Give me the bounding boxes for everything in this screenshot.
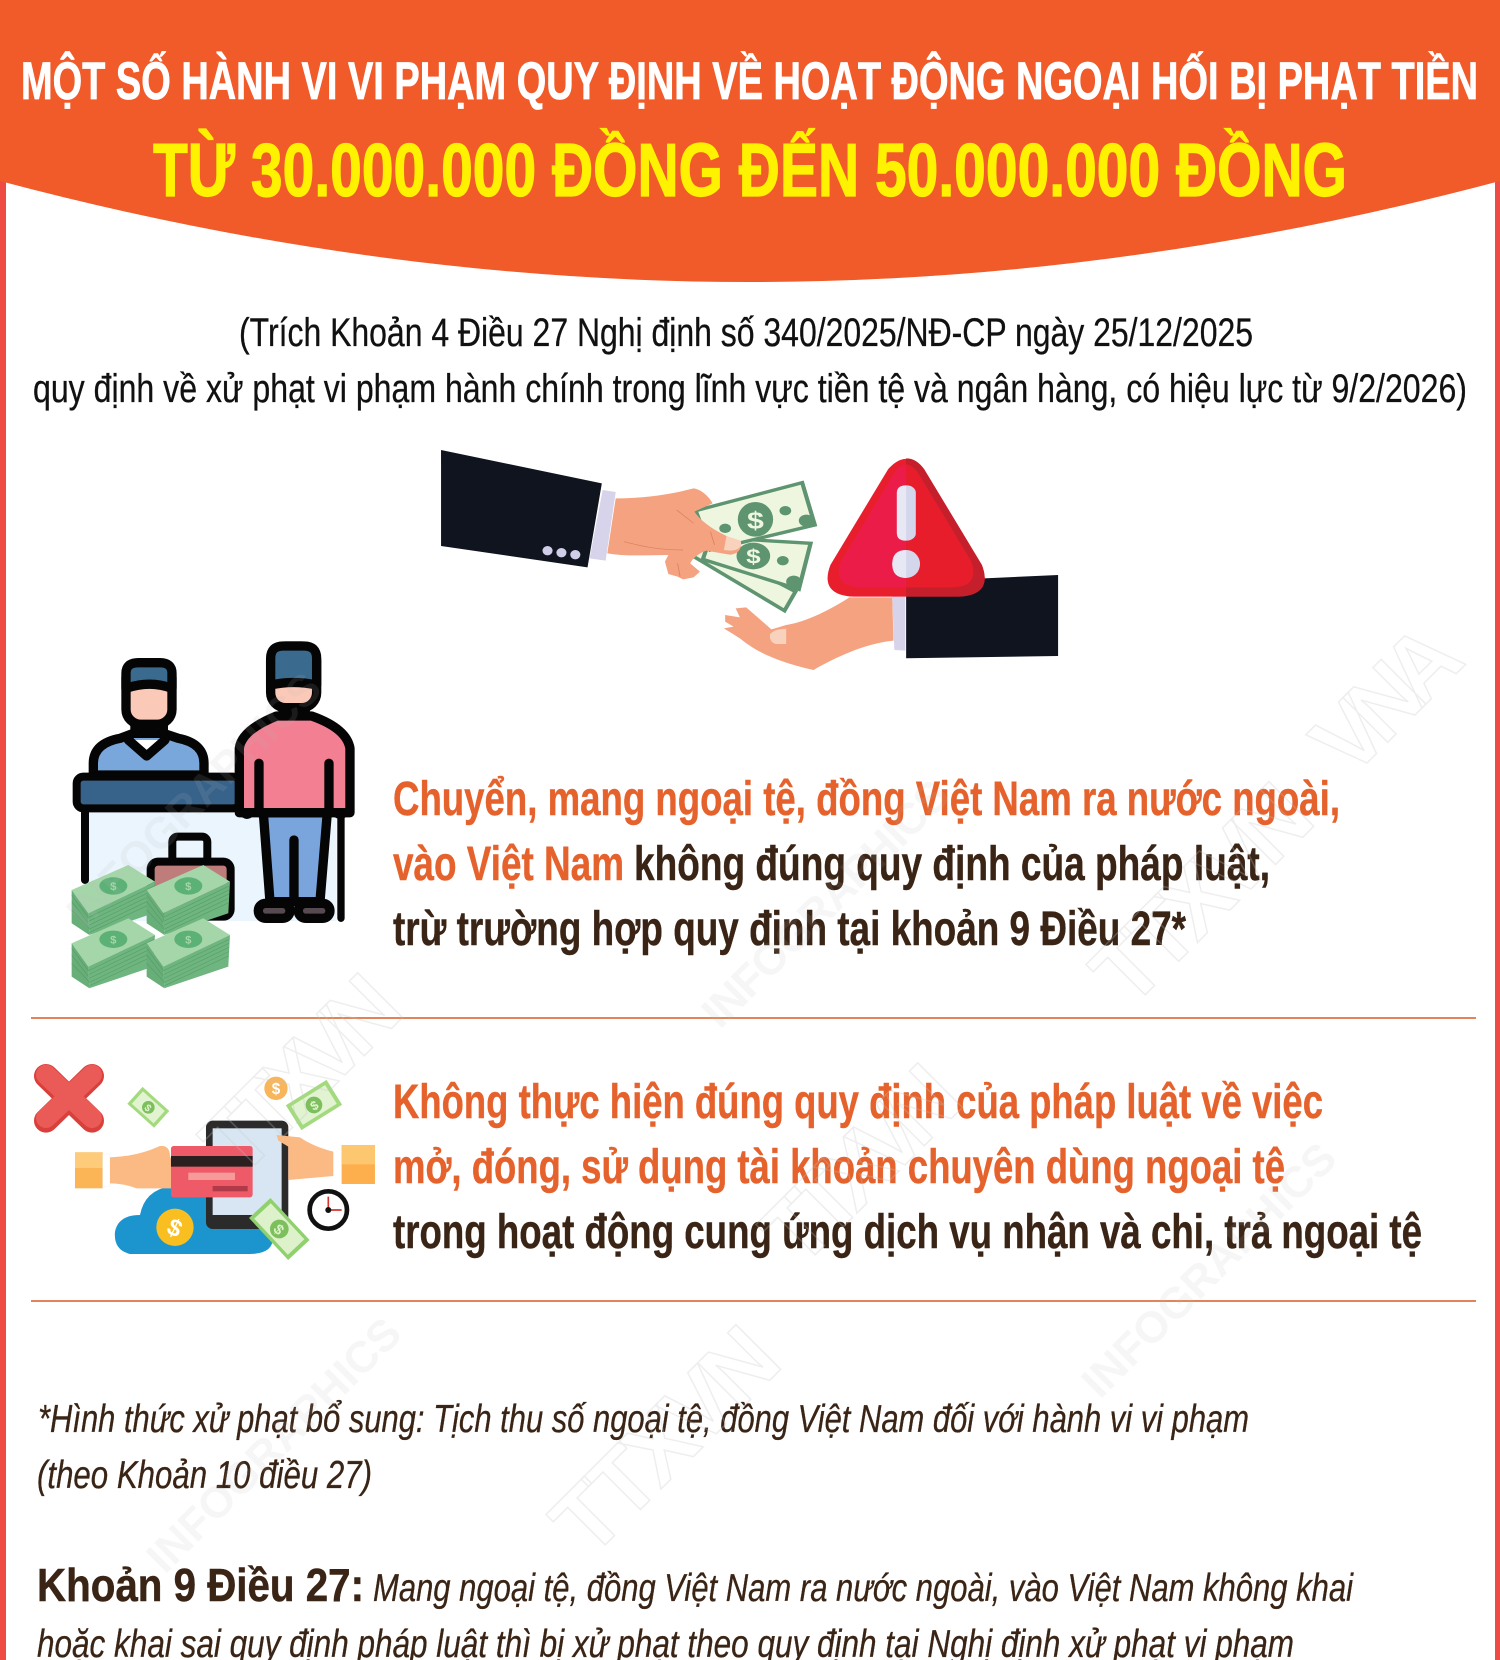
watermarks: TTXVN bbox=[742, 1042, 984, 1284]
subtitle: (Trích Khoản 4 Điều 27 Nghị định số 340/2025/NĐ-CP ngày 25/12/2025 bbox=[239, 311, 1253, 355]
icon: customer bbox=[239, 646, 350, 918]
icon: flying banknote right: $ bbox=[308, 1098, 321, 1114]
icon: right sleeve bbox=[892, 575, 1058, 658]
icon: coin bbox=[156, 1209, 194, 1246]
footnote: additional penalty bbox=[37, 1398, 1249, 1497]
icon: left sleeve bbox=[441, 450, 616, 567]
icon: red cross bbox=[46, 1075, 92, 1121]
text block: violation 1: không đúng quy định của pháp luật, bbox=[634, 838, 1270, 891]
illustration: online card payment bbox=[46, 1075, 375, 1260]
footnote: clause 9 article 27: Khoản 9 Điều 27: bbox=[37, 1559, 364, 1611]
icon: banknotes: $ bbox=[746, 545, 761, 568]
icon: credit card bbox=[171, 1146, 253, 1197]
icon: flying banknote left bbox=[127, 1087, 169, 1128]
icon: counter background bbox=[85, 808, 337, 921]
icon: flying banknote right bbox=[286, 1080, 342, 1130]
watermarks: VNA bbox=[1292, 602, 1484, 794]
footnote: additional penalty: (theo Khoản 10 điều 27) bbox=[37, 1454, 372, 1497]
icon: left hand with cuff bbox=[75, 1146, 181, 1188]
illustration: hands exchanging money with warning sign bbox=[441, 450, 1058, 670]
icon: clerk bbox=[93, 663, 204, 775]
watermarks bbox=[57, 602, 1484, 1582]
text block: violation 1: vào Việt Nam bbox=[393, 838, 624, 891]
icon: giving hand bbox=[607, 488, 741, 579]
icon: cloud bbox=[115, 1187, 273, 1254]
subtitle bbox=[33, 311, 1467, 411]
watermarks: TTXVN bbox=[532, 1304, 802, 1574]
text block: violation 2 bbox=[393, 1076, 1422, 1259]
watermarks: TTXVN bbox=[1072, 761, 1335, 1024]
icon: flying coin: $ bbox=[272, 1081, 281, 1098]
icon: bottom banknote bbox=[249, 1198, 310, 1260]
icon: receiving hand bbox=[724, 597, 894, 670]
icon: coin: $ bbox=[163, 1213, 186, 1243]
icon: tablet bbox=[206, 1121, 288, 1229]
watermarks: INFOGRAPHICS bbox=[57, 662, 332, 937]
footnote: clause 9 article 27 bbox=[37, 1559, 1354, 1660]
icon: right hand with cuff bbox=[277, 1135, 375, 1184]
icon: clock bbox=[310, 1191, 347, 1229]
icon: suitcase bbox=[151, 837, 231, 917]
watermarks: INFOGRAPHICS bbox=[1072, 1132, 1347, 1407]
header banner bbox=[0, 0, 1500, 282]
text block: violation 1: trừ trường hợp quy định tại khoản 9 Điều 27* bbox=[393, 903, 1186, 956]
icon: bottom banknote: $ bbox=[269, 1222, 287, 1239]
icon: flying banknote left: $ bbox=[142, 1102, 153, 1115]
icon: counter desk bbox=[77, 777, 240, 880]
text block: violation 1 bbox=[393, 773, 1340, 956]
icon: banknotes bbox=[689, 483, 815, 611]
icon: warning triangle bbox=[828, 458, 985, 597]
icon: banknotes: $ bbox=[747, 506, 764, 534]
illustration: customs counter and money bbox=[72, 646, 350, 988]
icon: money stacks bbox=[72, 865, 230, 988]
watermarks: INFOGRAPHICS bbox=[692, 769, 960, 1037]
icon: flying coin bbox=[264, 1077, 288, 1100]
watermarks: INFOGRAPHICS bbox=[137, 1307, 412, 1582]
watermarks: TTXVN bbox=[182, 952, 424, 1194]
